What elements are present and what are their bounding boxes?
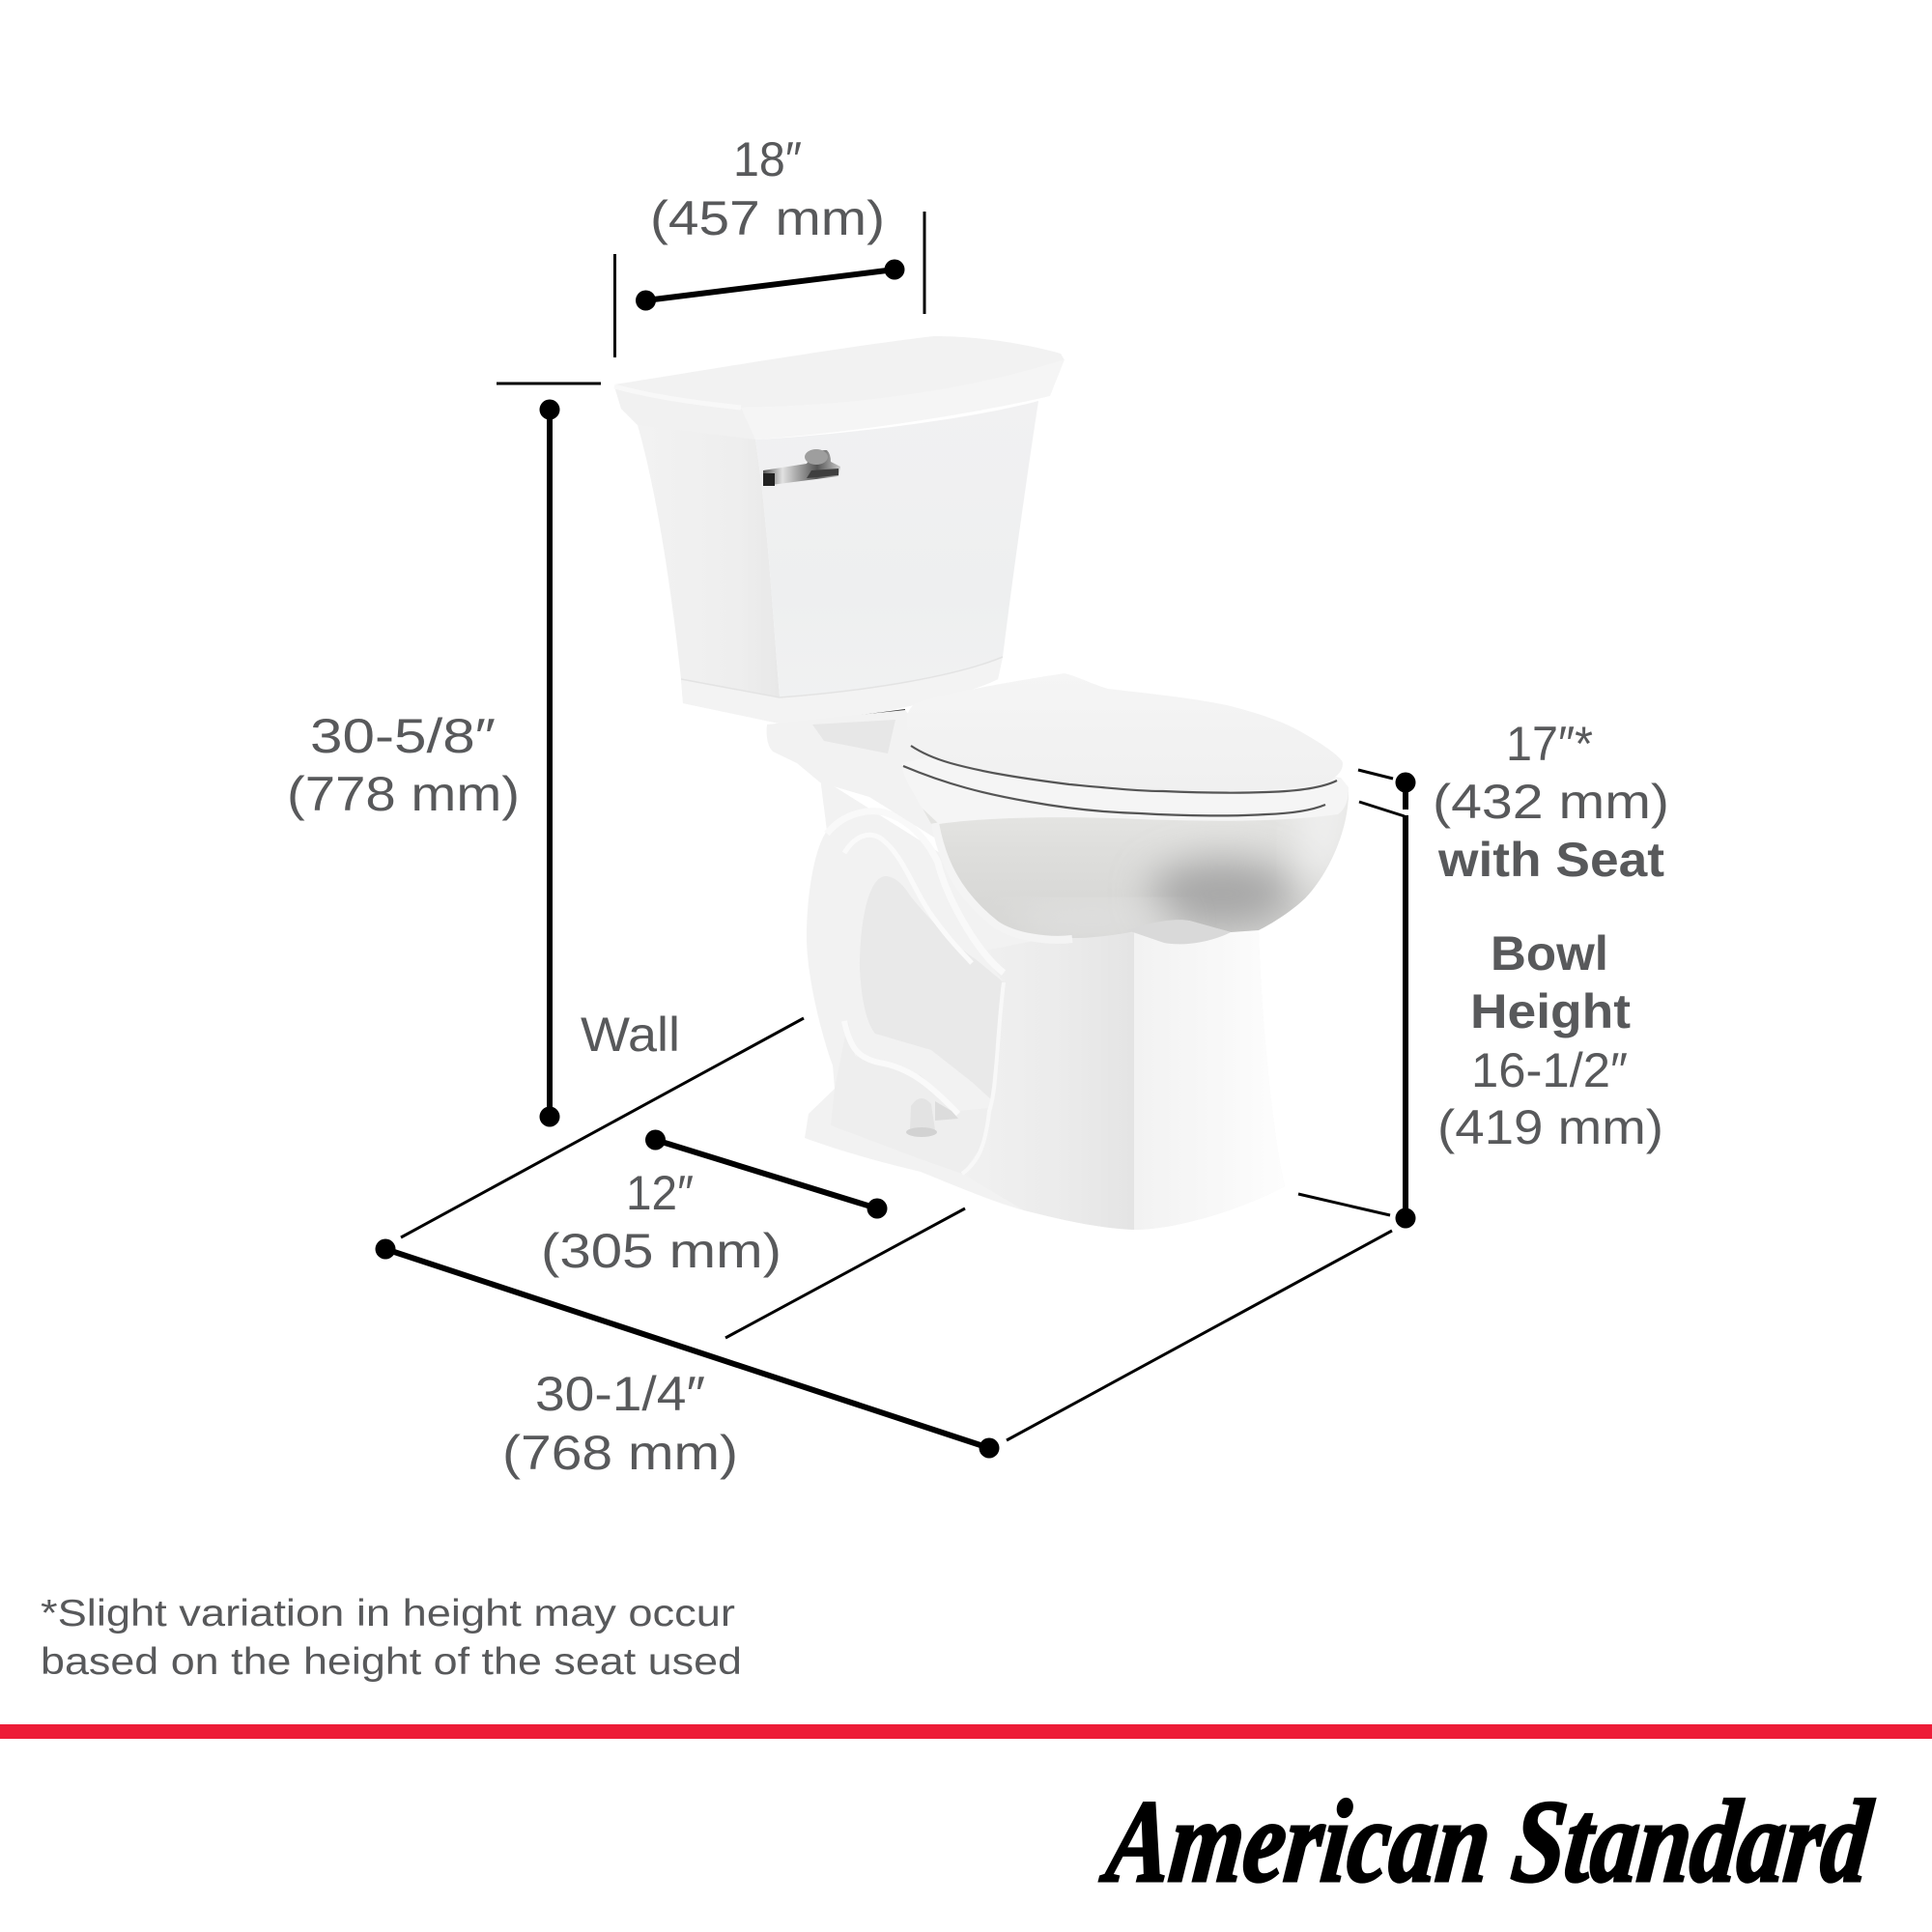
wall label and wall line: Wall [581,1008,680,1062]
dimension: bowl height and seat height: (419 mm) [1437,1100,1663,1154]
dimension: rough-in 12 in: (305 mm) [541,1224,781,1278]
dimension: rough-in 12 in [541,1130,965,1338]
dimension: depth 30-1/4 in: 30-1/4″ [535,1367,705,1421]
trapway ridges [827,811,1004,1174]
dimension: tank width 18 in: (457 mm) [650,191,885,245]
tank front [755,401,1038,724]
tank base trim [681,657,1003,724]
dimension: bowl height and seat height: Bowl [1491,926,1608,980]
red divider bar [0,1724,1932,1739]
toilet bowl [923,778,1349,944]
seat lid [906,673,1343,793]
bowl left ridge [935,823,1072,940]
tank lid [614,336,1065,440]
tank deck [767,710,966,850]
wall label and wall line [401,1008,804,1237]
toilet illustration [614,336,1349,1230]
dimension: total height 30-5/8 in [287,384,601,1126]
footnote: based on the height of the seat used [41,1641,742,1683]
dimension: tank width 18 in: 18″ [733,132,802,186]
dimension: bowl height and seat height: 16-1/2″ [1471,1043,1628,1097]
dimension: bowl height and seat height: 17″* [1506,717,1593,771]
pedestal rear wall [962,932,1134,1230]
dimension: tank width 18 in [614,132,924,357]
footnote [41,1593,742,1683]
bowl underside pad [1127,920,1231,944]
side recess [860,876,1004,1101]
footnote: *Slight variation in height may occur [41,1593,735,1634]
pedestal front face [1134,927,1285,1230]
dimension: bowl height and seat height: with Seat [1437,833,1664,887]
dimension: bowl height and seat height: Height [1470,984,1631,1038]
floor bolt cap [906,1098,958,1137]
flush handle [763,449,840,486]
toilet pedestal [805,778,1285,1230]
toilet tank [614,336,1065,724]
dimension: bowl height and seat height: (432 mm) [1433,775,1669,829]
dimension: depth 30-1/4 in: (768 mm) [502,1426,738,1480]
dimension: bowl height and seat height [1298,717,1669,1229]
dimension: depth 30-1/4 in [375,1231,1392,1480]
foot recess [831,1021,989,1174]
dimension: total height 30-5/8 in: (778 mm) [287,767,520,821]
bowl rim and seat [901,749,1349,824]
dimension: rough-in 12 in: 12″ [626,1166,694,1220]
tank side [614,386,780,724]
dimension: total height 30-5/8 in: 30-5/8″ [310,709,496,763]
